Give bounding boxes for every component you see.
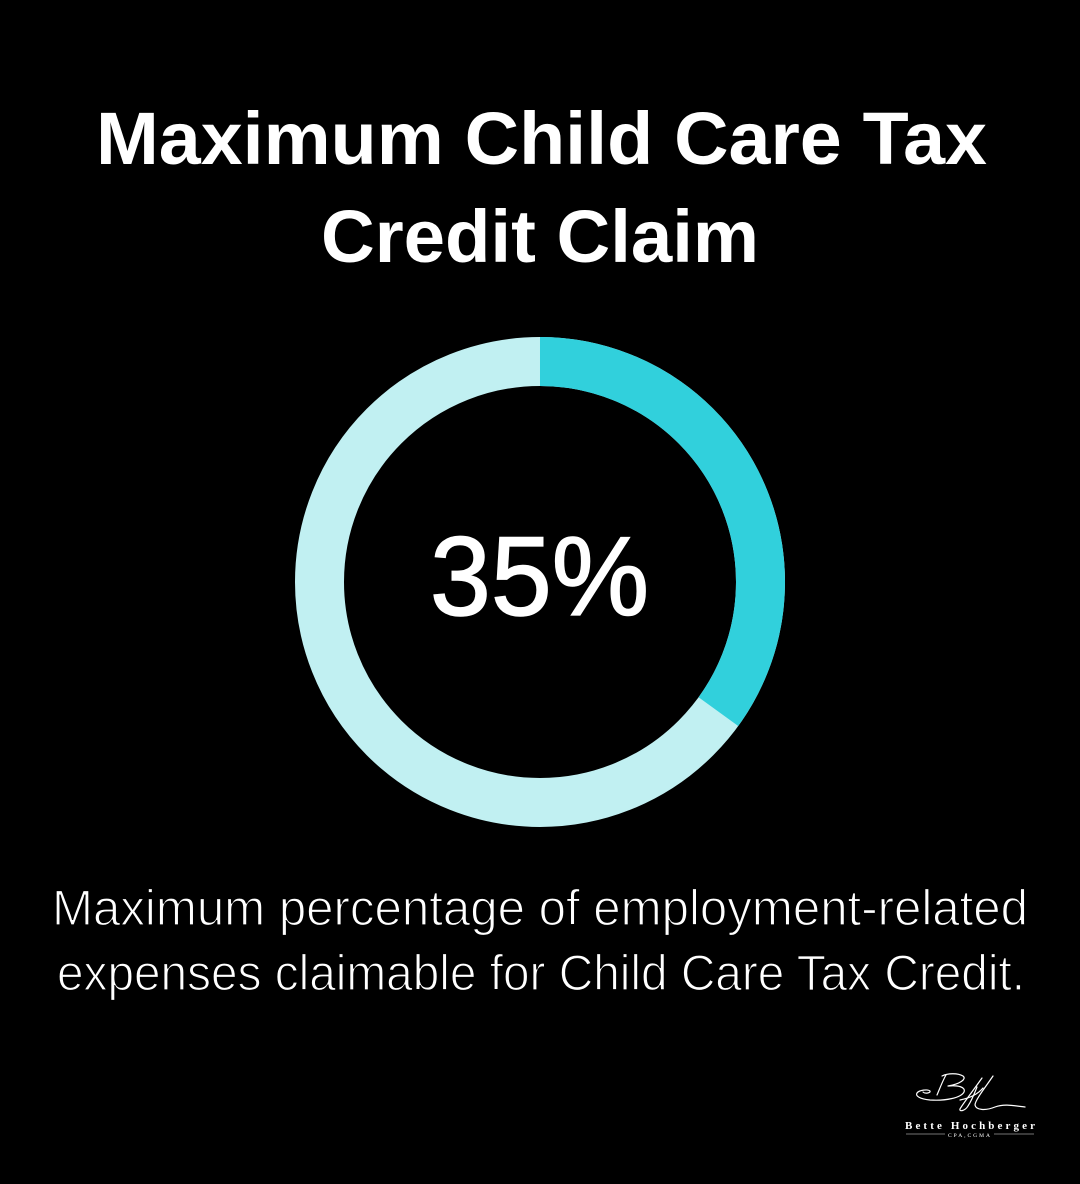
caption: expenses claimable for Child Care Tax Credit.	[57, 945, 1025, 1001]
icon: BH signature	[917, 1074, 1025, 1111]
caption	[52, 880, 1028, 1001]
percentage value: 35%	[430, 514, 649, 639]
title: Maximum Child Care Tax	[96, 97, 987, 180]
title: Credit Claim	[321, 195, 759, 278]
donut chart: 35%	[320, 362, 761, 802]
logo: Bette Hochberger	[905, 1074, 1035, 1139]
logo name: Bette Hochberger	[905, 1120, 1035, 1132]
caption: Maximum percentage of employment-related	[52, 880, 1028, 936]
title	[96, 97, 987, 278]
logo credentials: CPA,CGMA	[948, 1133, 990, 1139]
